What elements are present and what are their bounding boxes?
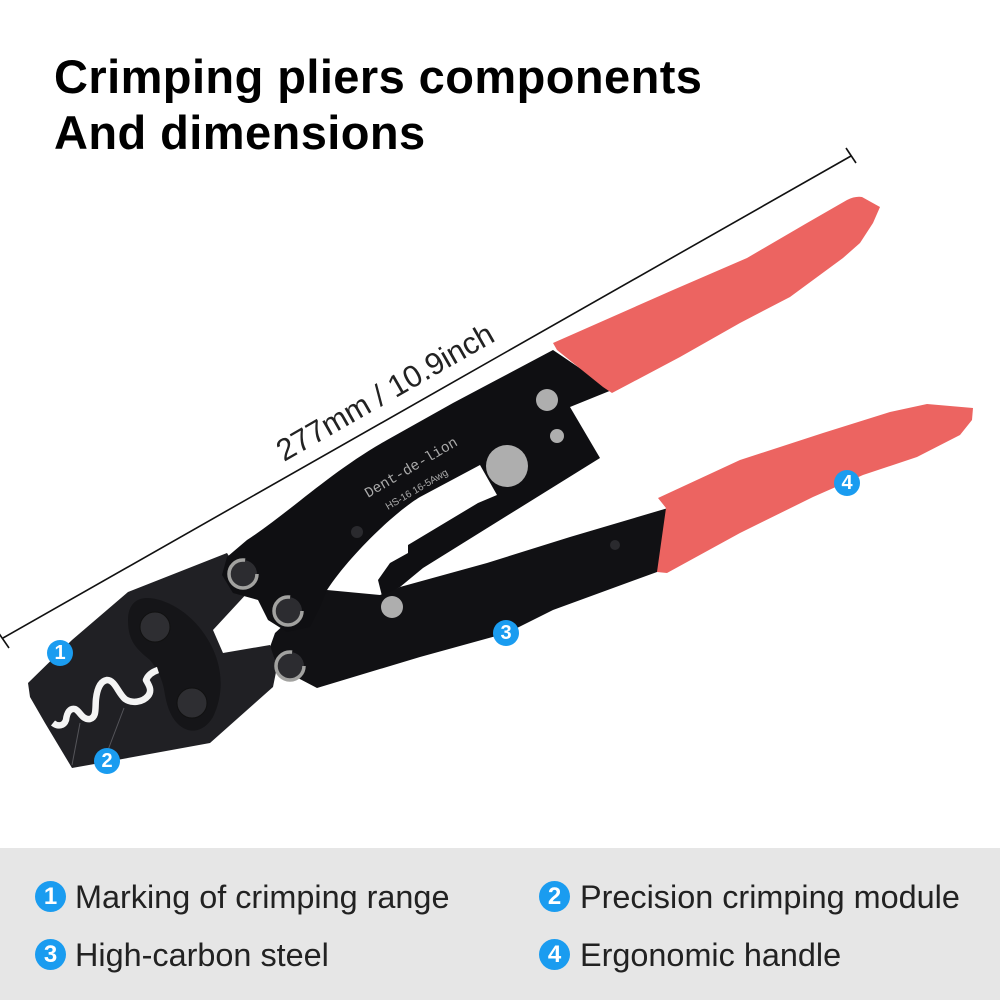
- legend item 1: 1: [44, 883, 57, 910]
- marker 4: 4: [841, 472, 853, 494]
- legend panel: [0, 848, 1000, 1000]
- pivot rivets: [229, 560, 304, 680]
- marker 2: [94, 748, 120, 774]
- crimping jaw opening: [53, 670, 158, 725]
- jaw rivets: [140, 612, 207, 718]
- legend item 4: 4: [548, 941, 561, 968]
- legend item 2: 2: [548, 883, 561, 910]
- dimension line: [0, 148, 856, 648]
- marker 1: 1: [54, 642, 66, 664]
- upper red handle: [553, 197, 880, 393]
- lower red handle: [657, 404, 973, 573]
- crimping head: [28, 553, 277, 768]
- model text: HS-16 16-5Awg: [384, 467, 450, 513]
- legend item 3: High-carbon steel: [75, 937, 329, 973]
- marker 2: 2: [101, 750, 113, 772]
- marker 3: 3: [500, 622, 512, 644]
- title: Crimping pliers components: [54, 50, 702, 103]
- marker 1: [47, 640, 73, 666]
- marker 4: [834, 470, 860, 496]
- legend item 1: Marking of crimping range: [75, 879, 449, 915]
- brand text: Dent-de-lion: [362, 435, 461, 502]
- jaw marking lines: [72, 708, 124, 765]
- legend item 3: 3: [44, 941, 57, 968]
- small holes: [351, 526, 620, 550]
- legend item 4: Ergonomic handle: [580, 937, 841, 973]
- round jaw plate: [128, 598, 221, 731]
- dimension label: 277mm / 10.9inch: [270, 316, 500, 468]
- marker 3: [493, 620, 519, 646]
- legend item 2: Precision crimping module: [580, 879, 960, 915]
- upper handle steel and latch: [222, 350, 612, 632]
- title: And dimensions: [54, 106, 426, 159]
- silver rivets: [381, 389, 564, 618]
- title: [54, 50, 702, 159]
- lower handle steel: [270, 508, 668, 688]
